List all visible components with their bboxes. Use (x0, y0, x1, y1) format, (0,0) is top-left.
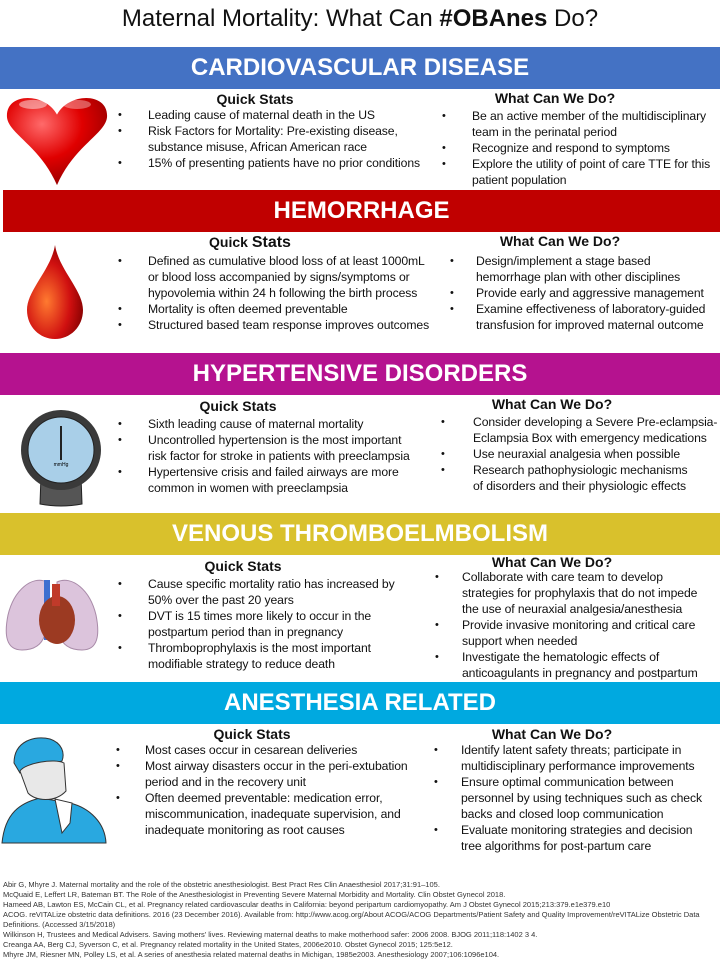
text: hemorrhage plan with other disciplines (476, 270, 680, 284)
banner: cardiovascular (0, 47, 720, 89)
list: hemorrhage actions: • (450, 255, 454, 267)
icon: blood pressure gauge (21, 410, 101, 506)
text: Risk Factors for Mortality: Pre-existing disease, (148, 124, 398, 138)
text: or blood loss accompanied by signs/symptoms or (148, 270, 410, 284)
text: Collaborate with care team to develop (462, 570, 663, 584)
banner: hemorrhage: HEMORRHAGE (273, 197, 450, 224)
list: hypertensive stats (118, 418, 122, 478)
list: hemorrhage actions: • (450, 287, 454, 299)
text: Ensure optimal communication between (461, 775, 674, 789)
text: Often deemed preventable: medication error, (145, 791, 383, 805)
text: Uncontrolled hypertension is the most important (148, 433, 401, 447)
list: vte actions: • (435, 619, 439, 631)
text: Research pathophysiologic mechanisms (473, 463, 688, 477)
references: ACOG. reVITALize obstetric data definitions. 2016 (23 December 2016). Available from: http://www.acog.org/About ACOG/ACOG Departments/Patient Safety and Quality Improvement/reVITALize Obstetric Data (3, 910, 700, 919)
text: Provide early and aggressive management (476, 286, 704, 300)
text: Design/implement a stage based (476, 254, 650, 268)
list: cv stats: • (118, 157, 122, 169)
list: hypertensive stats: • (118, 418, 122, 430)
text: Most airway disasters occur in the peri-extubation (145, 759, 408, 773)
text: Defined as cumulative blood loss of at least 1000mL (148, 254, 425, 268)
list: vte stats (118, 578, 122, 654)
text: inadequate monitoring as root causes (145, 823, 345, 837)
list: anesthesia stats: • (116, 792, 120, 804)
list: hemorrhage actions (450, 255, 454, 315)
heading: quick stats anesthesia: Quick Stats (213, 726, 291, 742)
icon: lungs (6, 580, 98, 650)
text: modifiable strategy to reduce death (148, 657, 335, 671)
text: Structured based team response improves outcomes (148, 318, 429, 332)
icon: anesthesiologist (2, 737, 106, 844)
text: the use of neuraxial analgesia/anesthesia (462, 602, 682, 616)
heading: what can we do cv: What Can We Do? (495, 90, 615, 106)
banner: hypertensive (0, 353, 720, 395)
heading: quick stats cv: Quick Stats (216, 91, 294, 107)
list: hypertensive actions: • (441, 464, 445, 476)
icon: heart (6, 98, 108, 185)
references: Hameed AB, Lawton ES, McCain CL, et al. Pregnancy related cardiovascular deaths in California: beyond peripartum cardiomyopathy. Am J Obstet Gynecol 2015;213:379.e1e379.e10 (3, 900, 610, 909)
banner: anesthesia: ANESTHESIA RELATED (224, 689, 496, 716)
list: cv stats (118, 109, 122, 169)
text: Eclampsia Box with emergency medications (473, 431, 707, 445)
list: hemorrhage actions: • (450, 303, 454, 315)
text: Identify latent safety threats; participate in (461, 743, 681, 757)
list: vte stats: • (118, 642, 122, 654)
list: anesthesia actions: • (434, 824, 438, 836)
list: hypertensive stats: • (118, 466, 122, 478)
list: vte actions: • (435, 651, 439, 663)
text: Hypertensive crisis and failed airways are more (148, 465, 399, 479)
text: Cause specific mortality ratio has increased by (148, 577, 395, 591)
list: vte actions: • (435, 571, 439, 583)
text: multidisciplinary performance improvements (461, 759, 695, 773)
list: hemorrhage stats (118, 255, 122, 331)
references: Wilkinson H, Trustees and Medical Advisers. Saving mothers' lives. Reviewing maternal deaths to make motherhood safer: 2006 2008. BJOG 2011;118:1402 3 4. (3, 930, 537, 939)
text: 15% of presenting patients have no prior conditions (148, 156, 420, 170)
text: Examine effectiveness of laboratory-guided (476, 302, 705, 316)
text: tree algorithms for post-partum care (461, 839, 651, 853)
list: cv stats: • (118, 109, 122, 121)
list: cv actions: • (442, 142, 446, 154)
list: hypertensive actions (441, 416, 445, 476)
references: Creanga AA, Berg CJ, Syverson C, et al. Pregnancy related mortality in the United States, 2006e2010. Obstet Gynecol 2015; 125:5e12. (3, 940, 453, 949)
banner: cardiovascular: CARDIOVASCULAR DISEASE (191, 54, 529, 81)
text: DVT is 15 times more likely to occur in the (148, 609, 371, 623)
text: of disorders and their physiologic effects (473, 479, 686, 493)
list: hemorrhage stats: • (118, 255, 122, 267)
text: backs and closed loop communication (461, 807, 663, 821)
list: anesthesia actions: • (434, 744, 438, 756)
list: anesthesia actions (434, 744, 438, 836)
banner: anesthesia (0, 682, 720, 724)
text: Recognize and respond to symptoms (472, 141, 670, 155)
text: miscommunication, inadequate supervision, and (145, 807, 401, 821)
list: anesthesia stats (116, 744, 120, 804)
text: strategies for prophylaxis that do not impede (462, 586, 697, 600)
list: vte stats: • (118, 610, 122, 622)
text: support when needed (462, 634, 577, 648)
list: cv actions: • (442, 110, 446, 122)
list: cv actions (442, 110, 446, 170)
list: vte stats: • (118, 578, 122, 590)
references: Definitions. (Accessed 3/15/2018) (3, 920, 115, 929)
heading: what can we do anesthesia: What Can We Do? (492, 726, 612, 742)
text: period and in the recovery unit (145, 775, 306, 789)
heading: quick stats vte: Quick Stats (204, 558, 282, 574)
text: Evaluate monitoring strategies and decision (461, 823, 692, 837)
text: Use neuraxial analgesia when possible (473, 447, 680, 461)
list: hemorrhage stats: • (118, 319, 122, 331)
text: risk factor for stroke in patients with preeclampsia (148, 449, 410, 463)
text: postpartum period than in pregnancy (148, 625, 343, 639)
references (3, 880, 700, 959)
text: 50% over the past 20 years (148, 593, 294, 607)
list: hypertensive stats: • (118, 434, 122, 446)
text: patient population (472, 173, 566, 187)
list: anesthesia stats: • (116, 760, 120, 772)
text: Leading cause of maternal death in the US (148, 108, 375, 122)
text: Provide invasive monitoring and critical care (462, 618, 695, 632)
icon: blood drop (27, 245, 83, 339)
list: hemorrhage stats: • (118, 303, 122, 315)
text: substance misuse, African American race (148, 140, 367, 154)
text: hypovolemia within 24 h following the birth process (148, 286, 417, 300)
text: Thromboprophylaxis is the most important (148, 641, 371, 655)
banner: hemorrhage (3, 190, 720, 232)
text: Mortality is often deemed preventable (148, 302, 348, 316)
title: Maternal Mortality: What Can #OBAnes Do? (122, 5, 598, 32)
list: anesthesia stats: • (116, 744, 120, 756)
text: Most cases occur in cesarean deliveries (145, 743, 357, 757)
list: cv actions: • (442, 158, 446, 170)
text: Explore the utility of point of care TTE for this (472, 157, 710, 171)
heading: quick stats hemorrhage: Quick Stats (209, 234, 291, 251)
text: common in women with preeclampsia (148, 481, 348, 495)
banner: vte (0, 513, 720, 555)
heading: what can we do hypertensive: What Can We Do? (492, 396, 612, 412)
text: Investigate the hematologic effects of (462, 650, 659, 664)
list: hypertensive actions: • (441, 448, 445, 460)
text: Sixth leading cause of maternal mortality (148, 417, 363, 431)
list: anesthesia actions: • (434, 776, 438, 788)
icon: blood pressure gauge: mmHg (54, 462, 69, 468)
banner: hypertensive: HYPERTENSIVE DISORDERS (193, 360, 527, 387)
text: personnel by using techniques such as check (461, 791, 702, 805)
heading: what can we do hemorrhage: What Can We Do? (500, 233, 620, 249)
text: anticoagulants in pregnancy and postpartum (462, 666, 698, 680)
text: transfusion for improved maternal outcome (476, 318, 704, 332)
list: hypertensive actions: • (441, 416, 445, 428)
text: Consider developing a Severe Pre-eclampsia- (473, 415, 717, 429)
banner: vte: VENOUS THROMBOELMBOLISM (172, 520, 548, 547)
text: Be an active member of the multidisciplinary (472, 109, 706, 123)
heading: quick stats hypertensive: Quick Stats (199, 398, 277, 414)
heading: what can we do vte: What Can We Do? (492, 554, 612, 570)
list: cv stats: • (118, 125, 122, 137)
list: vte actions (435, 571, 439, 663)
text: team in the perinatal period (472, 125, 617, 139)
references: McQuaid E, Leffert LR, Bateman BT. The Role of the Anesthesiologist in Preventing Severe Maternal Morbidity and Mortality. Clin Obstet Gynecol 2018. (3, 890, 505, 899)
references: Abir G, Mhyre J. Maternal mortality and the role of the obstetric anesthesiologist. Best Pract Res Clin Anaesthesiol 2017;31:91–105. (3, 880, 440, 889)
references: Mhyre JM, Riesner MN, Polley LS, et al. A series of anesthesia related maternal deaths in Michigan, 1985e2003. Anesthesiology 2007;106:1096e104. (3, 950, 499, 959)
